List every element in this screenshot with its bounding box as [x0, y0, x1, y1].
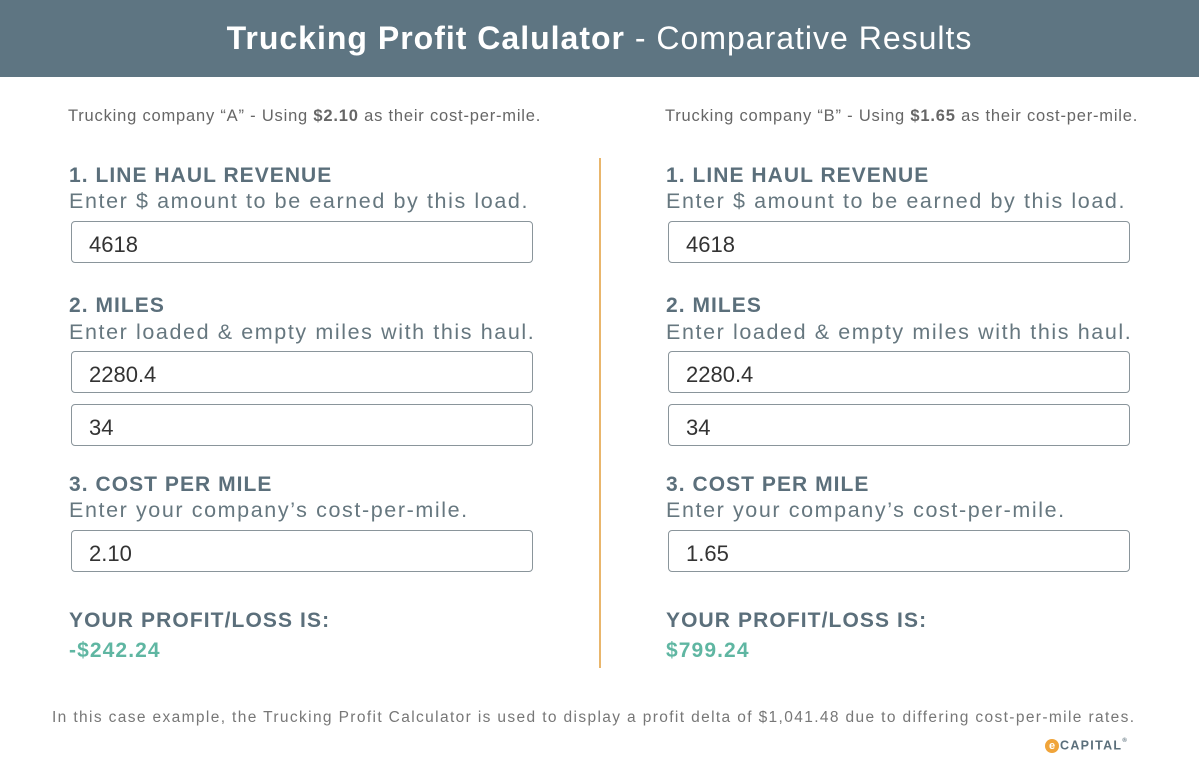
input revenue: 4618	[89, 232, 138, 257]
result label: YOUR PROFIT/LOSS IS:	[69, 609, 330, 632]
input miles empty: 34	[89, 415, 113, 440]
subtext 1: Enter $ amount to be earned by this load.	[69, 189, 529, 213]
subtext 3: Enter your company’s cost-per-mile.	[69, 498, 469, 522]
heading 3: 3. COST PER MILE	[666, 473, 870, 496]
panel: company A	[68, 107, 541, 662]
footer note: In this case example, the Trucking Profit Calculator is used to display a profit delta of $1,041.48 due to differing cost-per-mile rates.	[52, 709, 1135, 726]
result value: $799.24	[666, 639, 750, 662]
input revenue	[668, 221, 1130, 263]
divider	[599, 158, 601, 668]
heading 2: 2. MILES	[666, 294, 762, 317]
heading 2: 2. MILES	[69, 294, 165, 317]
heading 1: 1. LINE HAUL REVENUE	[666, 164, 929, 187]
panel: company B	[665, 107, 1138, 662]
intro B: Trucking company “B” - Using $1.65 as their cost-per-mile.	[665, 107, 1138, 125]
input cost	[668, 530, 1130, 572]
subtext 1: Enter $ amount to be earned by this load.	[666, 189, 1126, 213]
subtext 2: Enter loaded & empty miles with this haul.	[666, 320, 1132, 344]
result label: YOUR PROFIT/LOSS IS:	[666, 609, 927, 632]
intro A: Trucking company “A” - Using $2.10 as their cost-per-mile.	[68, 107, 541, 125]
input miles empty	[71, 404, 533, 446]
result value: -$242.24	[69, 639, 161, 662]
logo: CAPITAL®	[1060, 738, 1128, 753]
input cost	[71, 530, 533, 572]
title: Trucking Profit Calulator - Comparative Results	[227, 20, 972, 56]
input revenue: 4618	[686, 232, 735, 257]
heading 3: 3. COST PER MILE	[69, 473, 272, 496]
subtext 3: Enter your company’s cost-per-mile.	[666, 498, 1066, 522]
input miles loaded	[71, 351, 533, 393]
input cost: 2.10	[89, 541, 132, 566]
heading 1: 1. LINE HAUL REVENUE	[69, 164, 332, 187]
input revenue	[71, 221, 533, 263]
header bar	[0, 0, 1199, 77]
input cost: 1.65	[686, 541, 729, 566]
input miles empty: 34	[686, 415, 710, 440]
logo: e	[1049, 740, 1055, 752]
input miles loaded: 2280.4	[686, 362, 753, 387]
input miles loaded	[668, 351, 1130, 393]
subtext 2: Enter loaded & empty miles with this haul.	[69, 320, 535, 344]
input miles loaded: 2280.4	[89, 362, 156, 387]
input miles empty	[668, 404, 1130, 446]
